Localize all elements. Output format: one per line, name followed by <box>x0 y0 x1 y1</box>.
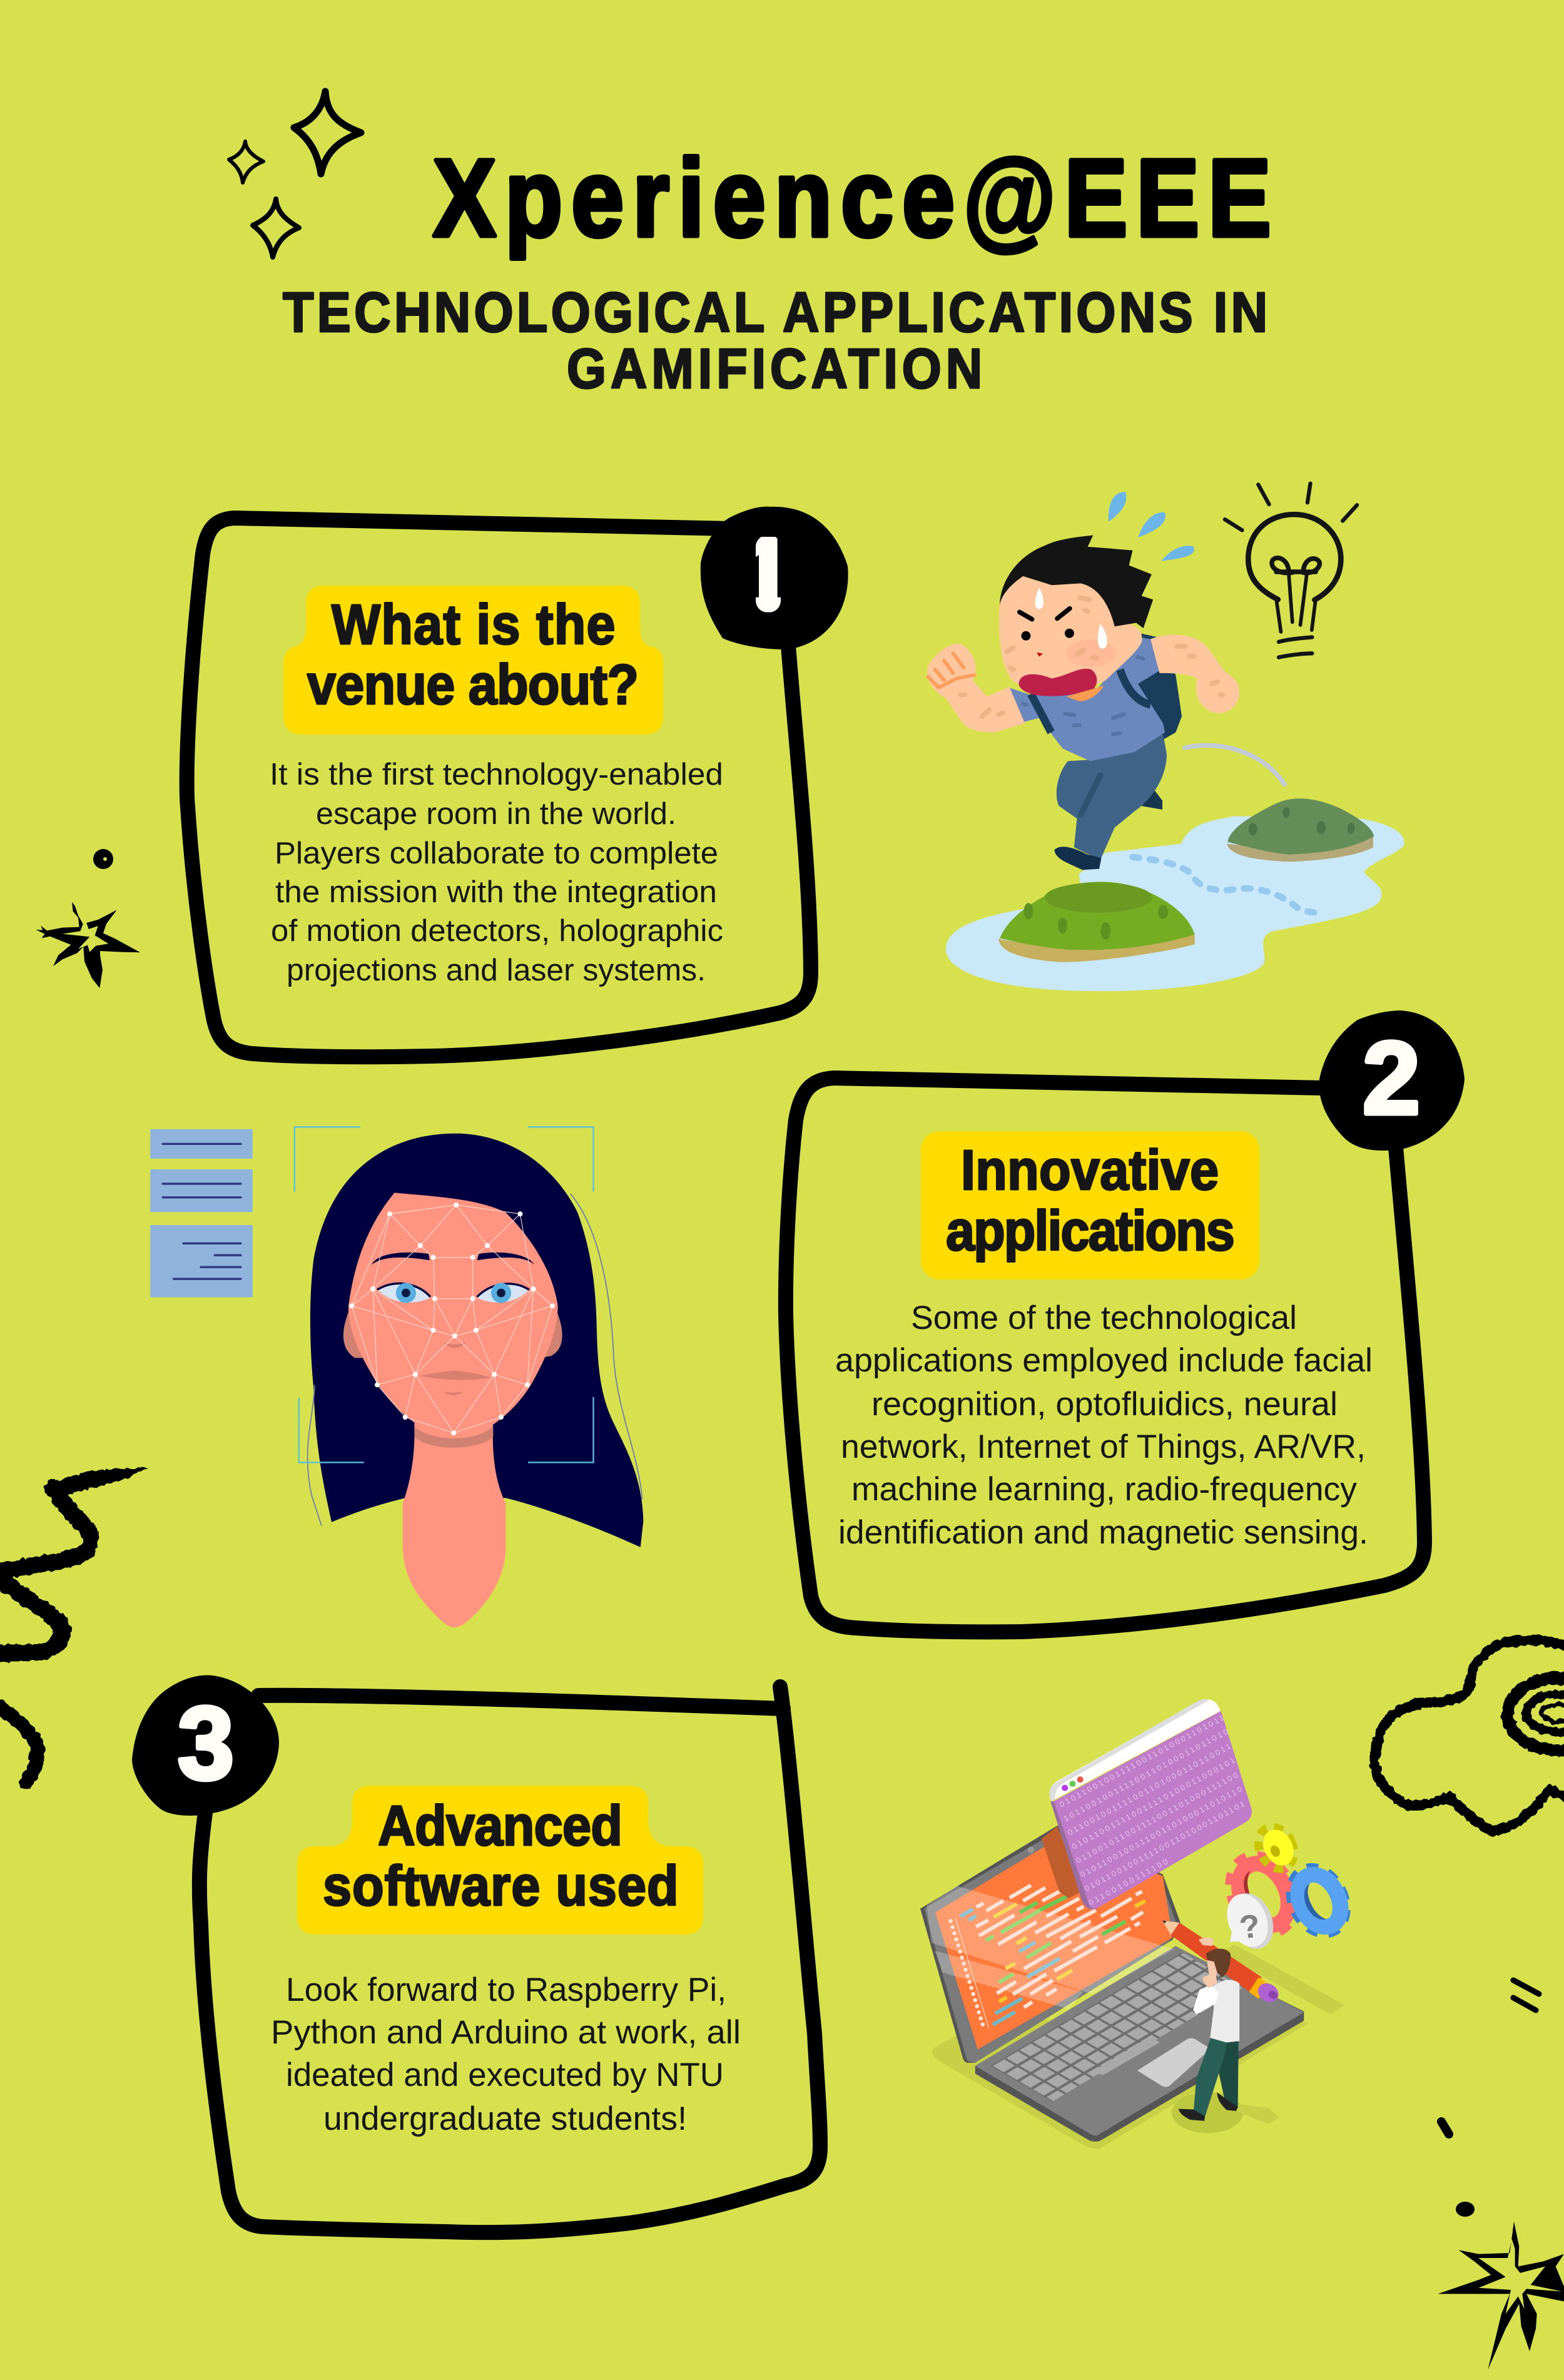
mesh nodes <box>349 1203 555 1435</box>
sweat drops <box>1109 492 1194 561</box>
label: card 1 heading: venue about? <box>307 654 639 716</box>
label: card 3 heading: software used <box>323 1855 679 1918</box>
label: card 2 heading <box>921 1131 1259 1279</box>
subtitle: TECHNOLOGICAL APPLICATIONS IN <box>283 281 1267 344</box>
subtitle: GAMIFICATION <box>567 337 982 400</box>
icon: number badge 3 <box>132 1675 279 1816</box>
text: card 3 body: Python and Arduino at work, all <box>271 2014 741 2051</box>
binary digits: 01100100111100 <box>1087 1858 1169 1907</box>
binary digits: 010110010011100110100011010110 <box>1079 1785 1244 1879</box>
laptop base <box>975 1948 1304 2142</box>
icon: number badge 2 <box>1319 1010 1465 1151</box>
label: card 3 heading: Advanced <box>378 1795 622 1858</box>
icon: sparkles <box>229 91 361 257</box>
thinking man <box>1172 1938 1279 2133</box>
far island <box>1227 798 1374 862</box>
text: card 3 body: ideated and executed by NTU <box>286 2057 724 2093</box>
icon: brush zigzag left <box>0 1467 148 1782</box>
dirt smudges <box>960 598 1222 716</box>
text: card 3 body: Look forward to Raspberry Pi, <box>286 1971 726 2008</box>
trousers <box>1057 734 1167 860</box>
text: card 1 body: It is the first technology-enabled <box>270 758 723 791</box>
text: card 1 body: of motion detectors, holographic <box>271 914 723 948</box>
lower scan brackets <box>299 1397 593 1462</box>
text: card 2 body <box>835 1299 1373 1551</box>
label: card 2 heading: Innovative <box>961 1139 1219 1202</box>
icon: number badge 2: 2 <box>1363 1020 1420 1136</box>
laptop lid <box>920 1826 1181 2063</box>
binary digits: 011001011001111001101000111100 <box>1075 1771 1239 1865</box>
text: card 1 body: the mission with the integration <box>275 875 717 909</box>
screen glare <box>927 1886 1174 2009</box>
illustration: running boy on islands <box>927 492 1404 991</box>
subtitle <box>283 281 1267 400</box>
illustration: facial recognition <box>150 1127 643 1627</box>
floating binary window <box>1050 1699 1252 1910</box>
text: card 2 body: applications employed include facial <box>835 1342 1373 1379</box>
code lines <box>960 1882 1145 2025</box>
text: card 1 body: escape room in the world. <box>316 797 676 831</box>
icon: doodle star left with dot <box>36 849 140 988</box>
head <box>999 576 1142 691</box>
blue gear <box>1280 1859 1356 1942</box>
icon: brush cloud scribble right <box>1374 1640 1564 1830</box>
text: card 2 body: machine learning, radio-frequency <box>851 1471 1358 1508</box>
text: card 2 body: identification and magnetic sensing. <box>838 1514 1368 1551</box>
binary digits: 010110011110011110100011000101 <box>1070 1756 1237 1851</box>
arc trail <box>1185 745 1284 785</box>
speech bubble with question mark <box>1220 1888 1281 1955</box>
ears <box>343 1310 562 1358</box>
binary digits <box>1058 1713 1246 1907</box>
data cards <box>150 1129 253 1297</box>
touchpad <box>1137 2038 1211 2087</box>
binary digits: 011001001111001101000110110011 <box>1066 1742 1232 1837</box>
right arm <box>1150 634 1239 713</box>
panel: card 3 frame <box>200 1687 820 2232</box>
icon: small brush marks right <box>1441 1980 1539 2217</box>
yellow gear <box>1252 1821 1301 1874</box>
dashed jump trail <box>1132 857 1318 913</box>
code gutter <box>950 1918 989 2029</box>
ground shadows <box>932 1945 1345 2149</box>
pencil <box>1162 1921 1282 2006</box>
label: card 1 heading <box>283 586 663 735</box>
icon: number badge 1: 1 <box>737 517 795 632</box>
stray hair line <box>308 1194 642 1525</box>
water pond <box>946 816 1404 991</box>
text: card 3 body <box>271 1971 741 2137</box>
shirt <box>1008 637 1165 761</box>
face mesh <box>352 1205 552 1433</box>
icon: number badge 1 <box>701 507 848 649</box>
binary digits: 101100100111100110100011011010 <box>1062 1727 1230 1823</box>
shoe <box>1054 847 1101 870</box>
speech bubble with question mark: ? <box>1237 1908 1262 1946</box>
cheek blush <box>1066 639 1117 667</box>
icon: doodle star bottom right <box>1438 2222 1564 2370</box>
back foot <box>1142 790 1162 810</box>
left arm and fist <box>927 644 1025 733</box>
panel: card 1 frame <box>187 518 811 1057</box>
label: card 3 heading <box>297 1786 703 1935</box>
binary digits: 010110010011110011010001101101 <box>1083 1799 1246 1893</box>
binary digits: 010110010011110011010001101011 <box>1058 1713 1226 1809</box>
text: card 1 body: Players collaborate to complete <box>275 837 718 870</box>
backpack straps <box>1031 669 1150 733</box>
panel: card 2 frame <box>786 1078 1424 1632</box>
label: card 1 heading: What is the <box>332 594 616 656</box>
illustration: laptop with code window, gears and thinking man <box>920 1699 1356 2149</box>
space bar <box>1093 2037 1160 2075</box>
red gear <box>1219 1846 1306 1943</box>
face <box>348 1193 558 1438</box>
hair <box>310 1134 643 1547</box>
screen <box>935 1839 1172 2050</box>
text: card 2 body: Some of the technological <box>911 1299 1297 1336</box>
backpack <box>1117 634 1182 740</box>
title: Xperience@EEE <box>433 136 1271 260</box>
eyebrows and eyes <box>372 1253 534 1395</box>
near island <box>998 882 1195 962</box>
neck shadow <box>414 1426 493 1448</box>
icon: number badge 3: 3 <box>178 1686 234 1801</box>
neck <box>403 1417 505 1627</box>
shirt smudges <box>1023 657 1144 734</box>
label: card 2 heading: applications <box>946 1200 1235 1263</box>
scan brackets <box>295 1127 593 1192</box>
keyboard <box>990 1952 1242 2102</box>
window shadow <box>1042 1826 1082 1898</box>
hair <box>1000 535 1153 628</box>
text: card 1 body <box>270 758 723 987</box>
icon: light bulb <box>1225 484 1357 658</box>
webcam <box>1028 1847 1034 1853</box>
text: card 2 body: recognition, optofluidics, neural <box>871 1386 1338 1423</box>
face features <box>1018 587 1107 701</box>
text: card 1 body: projections and laser systems. <box>287 954 706 987</box>
text: card 2 body: network, Internet of Things, AR/VR, <box>841 1428 1366 1465</box>
text: card 3 body: undergraduate students! <box>323 2100 687 2137</box>
